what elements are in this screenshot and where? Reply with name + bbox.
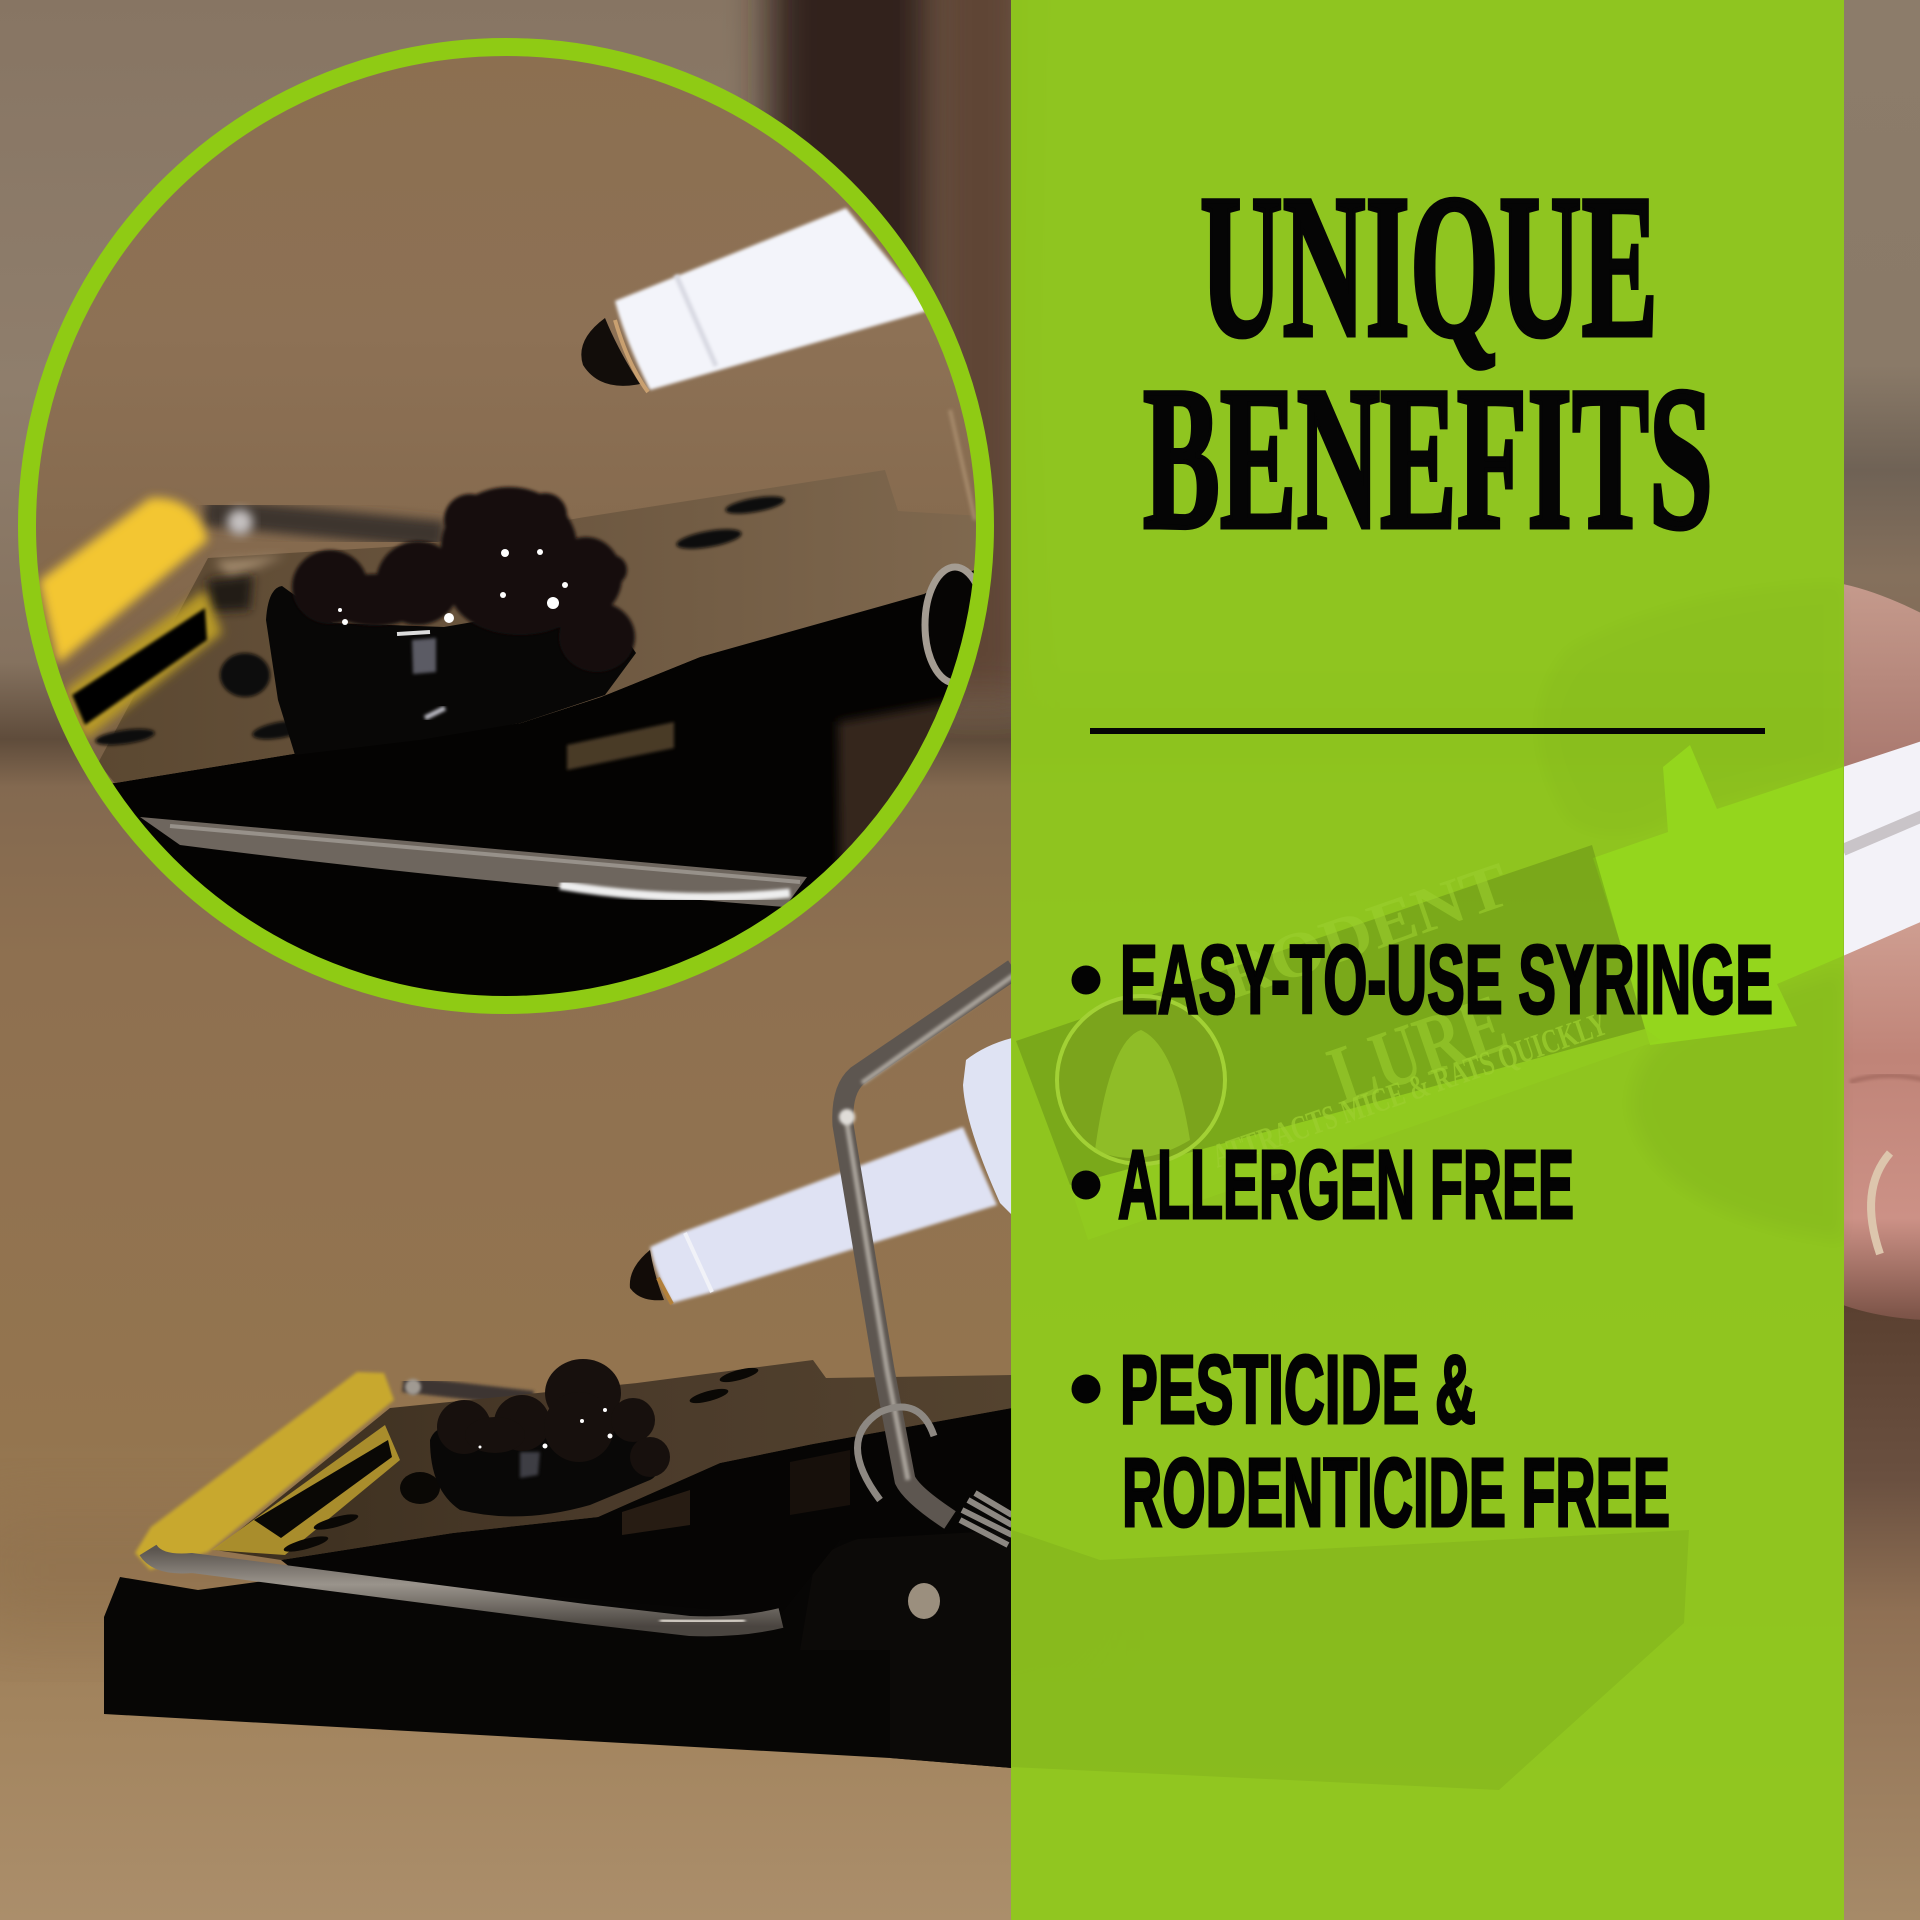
inset bait blob: [292, 487, 635, 672]
inset front wire: [140, 817, 807, 907]
ghost: lower thumb: [1632, 970, 1843, 1240]
plate underside shadow: [281, 1408, 1011, 1572]
syringe tip: [630, 1250, 664, 1300]
green benefits panel: [1011, 0, 1844, 1920]
ghost: lure label text: ATTRACTS MICE & RATS QUICKLY: [1208, 1005, 1612, 1176]
rivet: [908, 1583, 940, 1619]
trap base: [104, 1539, 1011, 1768]
back wire: [403, 1379, 533, 1399]
benefit: allergen free: [1072, 1130, 1574, 1239]
ghost: lure label text: [1208, 848, 1612, 1176]
ghost: upper finger: [1540, 584, 1843, 833]
hand and syringe at right edge: [1843, 584, 1920, 1320]
inset syringe tip: [581, 318, 640, 386]
inset yellow handle: [39, 498, 208, 664]
benefit: pesticide and rodenticide free: [1072, 1335, 1670, 1547]
trap pivot block: [890, 1758, 1011, 1768]
bait highlights: [338, 549, 568, 625]
yellow handle: [135, 1372, 394, 1570]
bait plate: [215, 1360, 1012, 1560]
plate holes: [282, 1365, 760, 1555]
ghost: lure label text: RODENT: [1211, 848, 1518, 1013]
ghost: lure tube: [1016, 845, 1645, 1185]
inset bait cup: [266, 586, 636, 755]
ghost: trap under panel: [1012, 1530, 1689, 1790]
inset syringe: [615, 208, 930, 390]
trigger wire: [839, 969, 1014, 1520]
bait cup: [430, 1428, 658, 1516]
bait blob: [437, 1359, 670, 1477]
benefit: pesticide and rodenticide free: PESTICIDE &: [1120, 1335, 1476, 1444]
inset backdrop: [36, 56, 976, 760]
inset thin wire: [950, 410, 975, 520]
ghost: tube light strip: [1070, 1029, 1660, 1240]
inset green ring: [27, 47, 985, 1005]
inset right ring: [925, 567, 985, 683]
inset underside black: [112, 570, 974, 996]
circular zoom inset: [20, 40, 1000, 1030]
upper finger: [1843, 584, 1920, 772]
ghost: syringe plunger: [1593, 745, 1843, 1045]
wire hook: [858, 1407, 934, 1500]
benefit: allergen free: ALLERGEN FREE: [1118, 1130, 1574, 1239]
inset back wire: [205, 509, 444, 535]
inset plate holes: [94, 493, 786, 748]
ghost: lure label text: LURE: [1318, 976, 1518, 1123]
white plunger: [1843, 740, 1920, 956]
thumbnail: [1871, 1153, 1890, 1254]
heading: [1143, 153, 1713, 572]
benefits list: [1072, 925, 1773, 1547]
ghost: badge: [1057, 996, 1225, 1164]
inset plate: [98, 470, 1000, 783]
syringe nozzle: [650, 1127, 997, 1303]
divider: [1090, 728, 1765, 734]
spring coil: [960, 1493, 1012, 1545]
inset plate reflection: [65, 590, 222, 740]
syringe collar: [963, 1038, 1012, 1215]
lower thumb: [1843, 915, 1920, 1320]
mouse trap photo: [104, 969, 1014, 1768]
front wire bail: [148, 1550, 781, 1626]
